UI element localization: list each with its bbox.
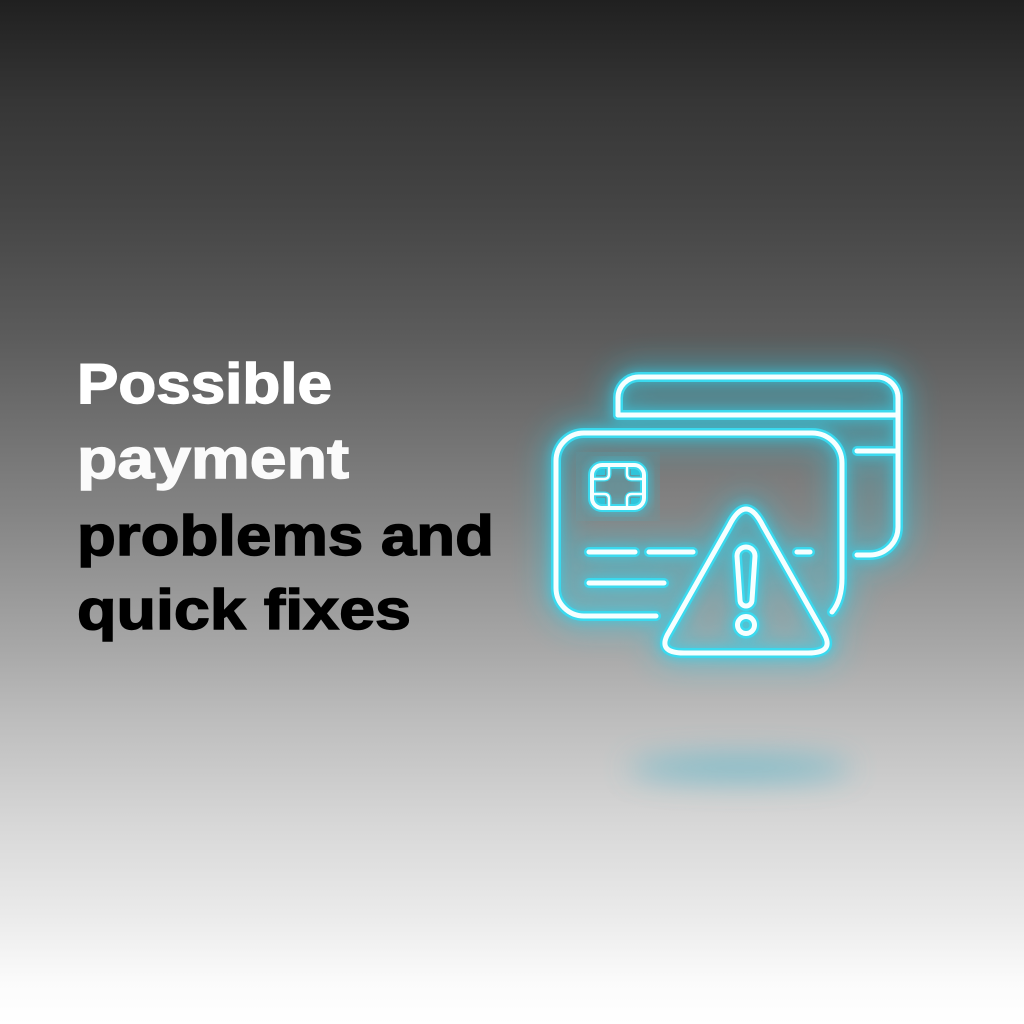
title line: payment: payment <box>77 427 349 491</box>
chip corner cell fills <box>596 469 640 504</box>
icon white core stroke <box>556 377 898 653</box>
floor shadow under icon <box>628 756 852 780</box>
title line: Possible: Possible <box>77 352 332 416</box>
title line: problems and: problems and <box>77 504 494 568</box>
title line: quick fixes: quick fixes <box>77 578 411 642</box>
icon outer cyan stroke <box>556 377 898 653</box>
icon: neon credit cards with warning triangle <box>556 377 898 653</box>
icon glow <box>556 377 898 653</box>
title <box>77 352 494 642</box>
